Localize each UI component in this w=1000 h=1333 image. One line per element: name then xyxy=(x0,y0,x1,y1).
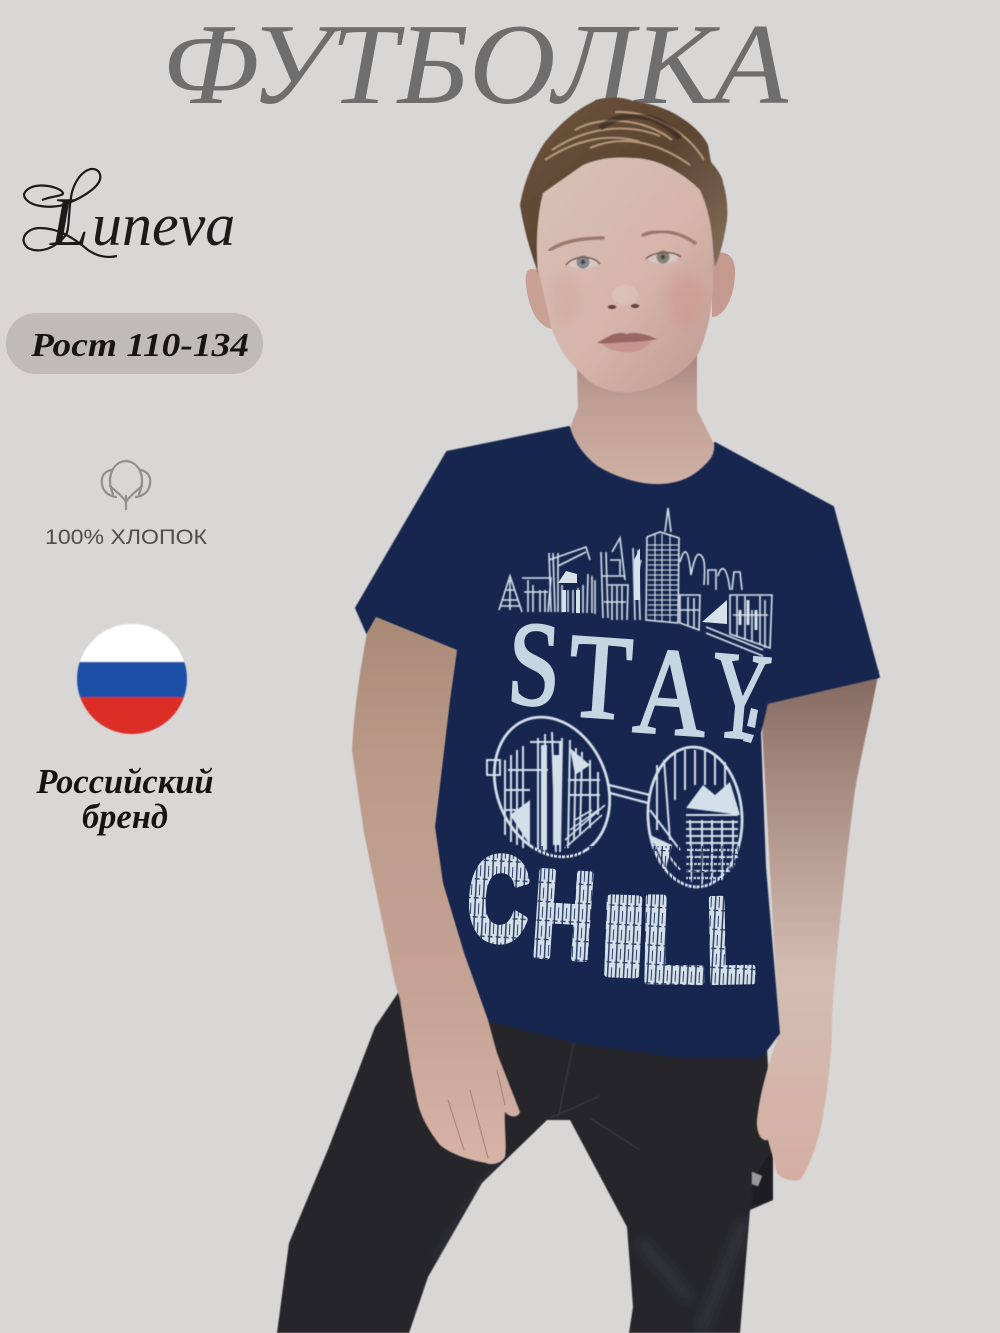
brand logo: Luneva: L xyxy=(49,184,89,261)
shirt print: CHILL xyxy=(463,831,756,1009)
shirt print: CHILL: L xyxy=(640,872,707,1009)
hair xyxy=(520,98,727,273)
shirt print: skyline xyxy=(499,508,772,656)
shirt print: sunglasses xyxy=(474,700,746,889)
shirt print: STAY xyxy=(505,597,776,767)
mouth xyxy=(597,333,657,352)
jeans xyxy=(277,993,773,1333)
brand logo: Luneva xyxy=(24,169,235,261)
eyebrows xyxy=(550,232,695,250)
icon: cotton boll xyxy=(102,461,150,509)
t-shirt xyxy=(356,427,879,1057)
shirt print: STAY: Y xyxy=(706,625,776,767)
russian brand label: Российский xyxy=(35,763,214,801)
size pill xyxy=(6,313,263,374)
right arm and hand xyxy=(757,670,879,1181)
shirt print: CHILL: C xyxy=(463,831,534,969)
shirt print: STAY: S xyxy=(505,597,564,732)
icon: russian flag xyxy=(77,624,187,734)
shirt print: CHILL: H xyxy=(528,845,599,986)
russian brand label: бренд xyxy=(82,798,168,836)
shirt print: CHILL: L xyxy=(705,872,756,1008)
neck xyxy=(570,350,714,490)
left arm and hand xyxy=(352,617,520,1164)
nose xyxy=(608,285,639,309)
shirt print: STAY: A xyxy=(630,621,712,764)
shirt print: punctuation mark xyxy=(743,708,758,743)
ears xyxy=(526,269,552,329)
face xyxy=(537,157,713,392)
brand logo: Luneva: uneva xyxy=(92,192,235,258)
boy model photo illustration xyxy=(277,98,879,1333)
material label: 100% ХЛОПОК xyxy=(45,525,208,549)
shirt print: CHILL hatching xyxy=(464,846,760,990)
skyline filled accents xyxy=(558,548,727,624)
size pill: Рост 110-134 xyxy=(30,327,249,364)
eyes xyxy=(566,250,681,269)
shirt print: STAY: T xyxy=(564,609,636,746)
title: ФУТБОЛКА xyxy=(162,1,789,129)
shirt print: CHILL: I xyxy=(596,873,650,1000)
finger creases xyxy=(448,1070,505,1158)
